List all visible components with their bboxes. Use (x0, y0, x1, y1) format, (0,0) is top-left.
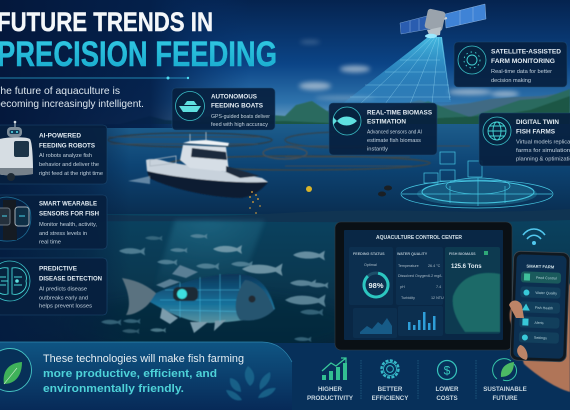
satellite (400, 4, 486, 38)
fish biomass panel: 125.6 Tons (451, 264, 482, 270)
conclusion text: These technologies will make fish farming (43, 353, 244, 365)
water quality table: Dissolved Oxygen (398, 274, 428, 278)
card: digital twin fish farms: FISH FARMS (516, 128, 555, 136)
icon: lower costs: $ (444, 364, 451, 378)
icon: better efficiency (372, 360, 409, 402)
card: AI-powered feeding robots: AI-POWERED (39, 132, 81, 140)
icon: fish (333, 107, 361, 135)
buoys (306, 186, 392, 196)
card: real-time biomass estimation (329, 103, 437, 155)
hologram digital twin (401, 152, 553, 208)
conclusion text: more productive, efficient, and (43, 368, 217, 380)
card: satellite-assisted monitoring: Real-time data for better (491, 69, 552, 75)
mountains (120, 89, 570, 128)
card: smart wearable sensors: real time (39, 240, 61, 246)
icon: higher productivity (307, 358, 354, 402)
icon: better efficiency: BETTER (378, 386, 403, 393)
icon: robot (0, 121, 33, 181)
card: satellite-assisted monitoring: SATELLITE-ASSISTED (491, 48, 561, 56)
card: autonomous feeding boats: GPS-guided boats deliver (211, 114, 270, 120)
icon: boat (176, 92, 204, 120)
left dark overlay (0, 0, 250, 128)
underwater scene (0, 125, 570, 355)
icon: sustainable future: FUTURE (492, 395, 518, 402)
phone: Settings (534, 336, 547, 340)
card: autonomous feeding boats (172, 88, 275, 130)
card: real-time biomass estimation: instantly (367, 146, 388, 152)
water surface (0, 124, 570, 216)
icon: lower costs: LOWER (435, 386, 459, 393)
benefits row (307, 358, 527, 402)
clouds (299, 40, 519, 100)
icon: higher productivity: HIGHER (318, 386, 343, 393)
main smart fish (122, 265, 275, 333)
phone: Alerts (534, 321, 544, 325)
icon: AI brain (0, 261, 30, 301)
water quality table: 26.4 °C (428, 264, 441, 268)
water quality table: WATER QUALITY (397, 252, 428, 256)
card: smart wearable sensors: Monitor health, activity, (39, 222, 98, 228)
card: satellite-assisted monitoring: decision making (491, 78, 531, 84)
conclusion panel (0, 342, 292, 410)
bottom band (0, 343, 570, 410)
card: real-time biomass estimation: Advanced sensors and AI (367, 130, 422, 136)
fish pens (108, 132, 470, 170)
fish biomass panel: FISH BIOMASS (449, 252, 476, 256)
icon: satellite gear (458, 46, 486, 74)
card: autonomous feeding boats: FEEDING BOATS (211, 102, 263, 110)
conclusion text (43, 353, 244, 395)
phone: Water Quality (535, 291, 557, 296)
title (0, 7, 277, 74)
icon: wifi (523, 229, 545, 244)
title: FUTURE TRENDS IN (0, 7, 213, 37)
card: predictive disease detection: AI predicts disease (39, 286, 87, 292)
fish biomass panel (445, 247, 500, 334)
water quality table: pH (400, 285, 405, 289)
boat (128, 132, 268, 198)
card: real-time biomass estimation: REAL-TIME BIOMASS (367, 110, 432, 116)
phone: Fish Health (535, 306, 553, 310)
icon: wearable watch (0, 197, 31, 241)
card: predictive disease detection (0, 258, 107, 315)
icon: leaf decoration (226, 366, 276, 400)
dashboard title: AQUACULTURE CONTROL CENTER (376, 235, 462, 241)
card: satellite-assisted monitoring (454, 42, 567, 87)
icon: sustainable future (483, 359, 527, 402)
icon: lower costs: COSTS (436, 395, 458, 402)
divider (0, 76, 189, 80)
feeding status gauge: 98% (368, 281, 384, 290)
icon: leaf badge (0, 348, 32, 392)
card: smart wearable sensors: SENSORS FOR FISH (39, 210, 99, 218)
phone: Feed Control (536, 276, 557, 281)
fish school (101, 234, 328, 342)
bar chart (398, 306, 443, 336)
sky background (0, 0, 570, 128)
smartphone in hand (509, 251, 570, 392)
icon: higher productivity: PRODUCTIVITY (307, 395, 354, 402)
tablet dashboard (335, 222, 512, 350)
feeding status gauge: Optimal (364, 263, 377, 267)
feeding status gauge: FEEDING STATUS (353, 252, 385, 256)
card: AI-powered feeding robots: right feed at the right time (39, 171, 103, 177)
card: AI-powered feeding robots: behavior and deliver the (39, 162, 99, 168)
card: digital twin fish farms (479, 113, 570, 166)
phone: SMART FARM (526, 264, 555, 269)
card: autonomous feeding boats: feed with high accuracy (211, 122, 268, 128)
card: satellite-assisted monitoring: FARM MONITORING (491, 58, 555, 65)
card: autonomous feeding boats: AUTONOMOUS (211, 94, 257, 100)
feed pellets from boat (249, 191, 275, 248)
card: predictive disease detection: helps prevent losses (39, 304, 92, 310)
phone (510, 251, 570, 362)
water quality table: 7.4 (436, 285, 441, 289)
line chart (353, 308, 397, 338)
card: real-time biomass estimation: estimate fish biomass (367, 138, 421, 144)
icon: lower costs (435, 360, 459, 402)
card: AI-powered feeding robots: AI robots analyze fish (39, 153, 92, 159)
card: real-time biomass estimation: ESTIMATION (367, 118, 406, 126)
card: AI-powered feeding robots: FEEDING ROBOTS (39, 142, 95, 150)
card: predictive disease detection: outbreaks early and (39, 296, 88, 302)
fingers (509, 301, 528, 360)
card: predictive disease detection: PREDICTIVE (39, 266, 77, 272)
icon: globe (483, 117, 511, 145)
water quality table: Turbidity (401, 296, 415, 300)
card: predictive disease detection: DISEASE DETECTION (39, 276, 102, 282)
icon: sustainable future: SUSTAINABLE (483, 386, 527, 393)
water quality table: Temperature (398, 264, 419, 268)
card: AI-powered feeding robots (0, 121, 107, 184)
water quality table: 6.2 mg/L (428, 274, 442, 278)
hand (510, 283, 570, 392)
icon: better efficiency: EFFICIENCY (372, 395, 409, 402)
card: smart wearable sensors: and stress levels in (39, 231, 87, 237)
card: smart wearable sensors: SMART WEARABLE (39, 200, 97, 208)
card: digital twin fish farms: farms for simulation, (516, 148, 570, 154)
water quality table: 12 NTU (431, 296, 444, 300)
card: smart wearable sensors (0, 195, 107, 249)
feeding status gauge (349, 247, 393, 305)
subtitle (0, 86, 144, 110)
conclusion text: environmentally friendly. (43, 383, 184, 395)
water quality table (396, 247, 444, 305)
card: digital twin fish farms: DIGITAL TWIN (516, 119, 559, 126)
satellite beam (342, 37, 451, 104)
title: PRECISION FEEDING (0, 35, 277, 74)
